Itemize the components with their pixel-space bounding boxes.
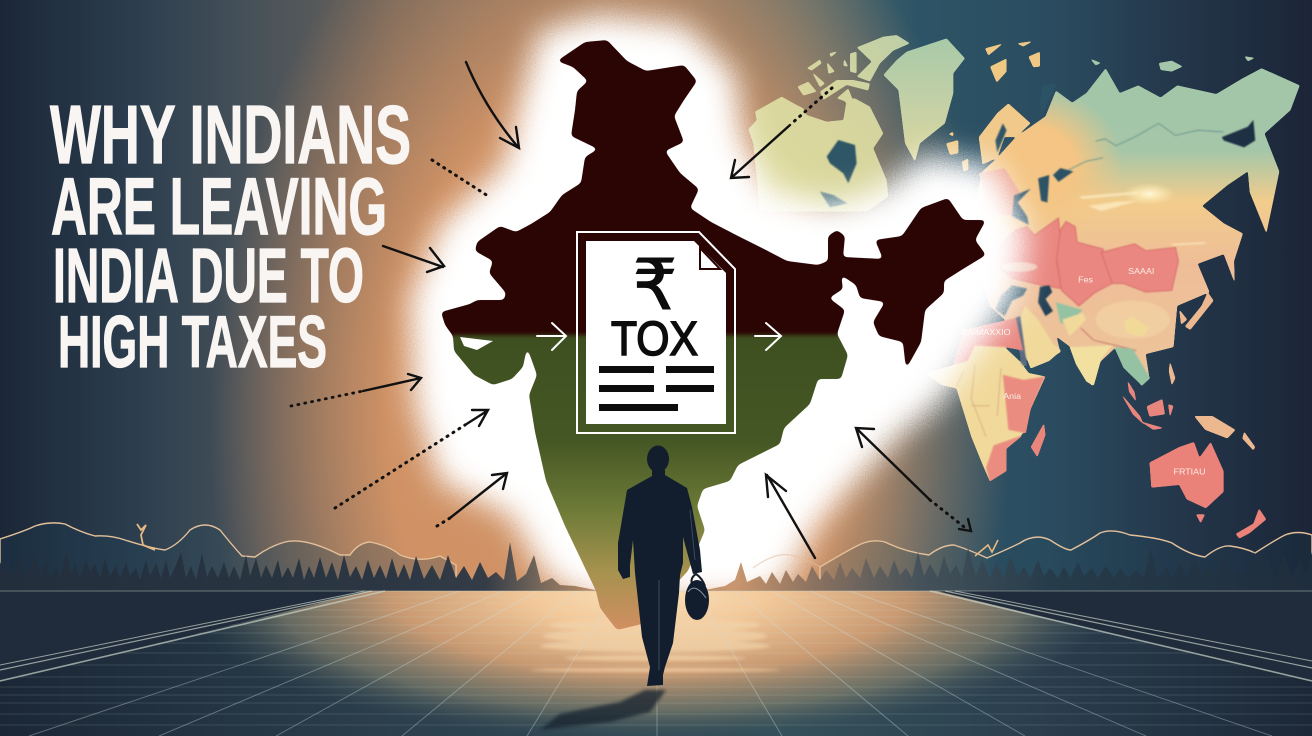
map: North Atlantic islands	[946, 41, 1040, 172]
map: Eurasia	[968, 68, 1300, 386]
map: Indonesia	[1120, 380, 1174, 430]
Gujarat white inlet	[460, 337, 493, 350]
white glow around India	[410, 15, 1027, 600]
map: tiny labels: Fes	[1078, 275, 1093, 284]
title: INDIA DUE TO	[53, 233, 364, 319]
map: North America	[748, 35, 910, 212]
person shadow	[540, 690, 666, 730]
world map	[925, 56, 1300, 539]
map: Australia and New Zealand	[1149, 442, 1266, 539]
arrow 6	[437, 518, 450, 526]
hills contour right	[753, 531, 1312, 591]
map: Greenland	[883, 38, 965, 162]
document fold	[700, 248, 720, 269]
title: WHY INDIANS	[50, 88, 411, 181]
map: tiny labels: SAAAI	[1128, 266, 1154, 276]
map: Africa	[925, 318, 1046, 481]
map: arctic islands east	[1090, 56, 1255, 72]
coat highlights	[659, 510, 695, 670]
arrow 9	[790, 88, 832, 125]
floor reflections	[530, 618, 780, 672]
document outer outline	[577, 232, 735, 433]
TOX label: TOX	[611, 313, 698, 366]
title	[50, 88, 411, 383]
document text lines	[599, 366, 714, 411]
side rails	[0, 591, 1312, 681]
map: sun glow	[1079, 183, 1205, 246]
map: tiny labels: EAIMAXXIO	[962, 327, 1011, 337]
arrow 7	[766, 475, 815, 558]
bag	[685, 574, 709, 620]
hills contour left	[0, 523, 456, 591]
arrow 3	[383, 246, 444, 272]
rupee symbol: ₹	[633, 244, 677, 326]
India northeast tail	[873, 300, 925, 369]
tax document	[577, 232, 735, 433]
map: pink countries	[990, 218, 1178, 306]
title: ARE LEAVING	[51, 162, 387, 252]
title: HIGH TAXES	[58, 302, 327, 383]
person walking	[618, 446, 709, 686]
arrow 4	[291, 391, 363, 406]
ground plane	[0, 591, 1312, 736]
map: tiny labels: FRTIAU	[1174, 467, 1206, 477]
map: Hudson Bay	[827, 140, 857, 183]
black arrows	[291, 62, 971, 558]
map: tiny labels	[962, 266, 1206, 477]
grid lines	[0, 591, 1312, 736]
map: Madagascar	[1031, 423, 1046, 457]
white arrows beside document	[537, 323, 781, 350]
skyline grass silhouette	[0, 542, 1312, 591]
hill squiggle	[137, 524, 155, 550]
arrow 5	[335, 425, 465, 508]
map: East Asia islands	[1169, 292, 1255, 451]
arrow 1	[466, 62, 519, 148]
map: Caspian and Black seas	[995, 262, 1053, 316]
map: China highlight	[1081, 301, 1170, 351]
India map silhouette	[441, 40, 986, 630]
map: tiny labels: Ania	[1003, 391, 1021, 401]
document page	[586, 241, 726, 424]
map: North Atlantic	[748, 35, 1040, 212]
arrow 8 double-ended	[856, 428, 930, 500]
map: Arabia and South Asia	[1015, 302, 1150, 386]
arrow 2 dotted	[432, 160, 488, 196]
